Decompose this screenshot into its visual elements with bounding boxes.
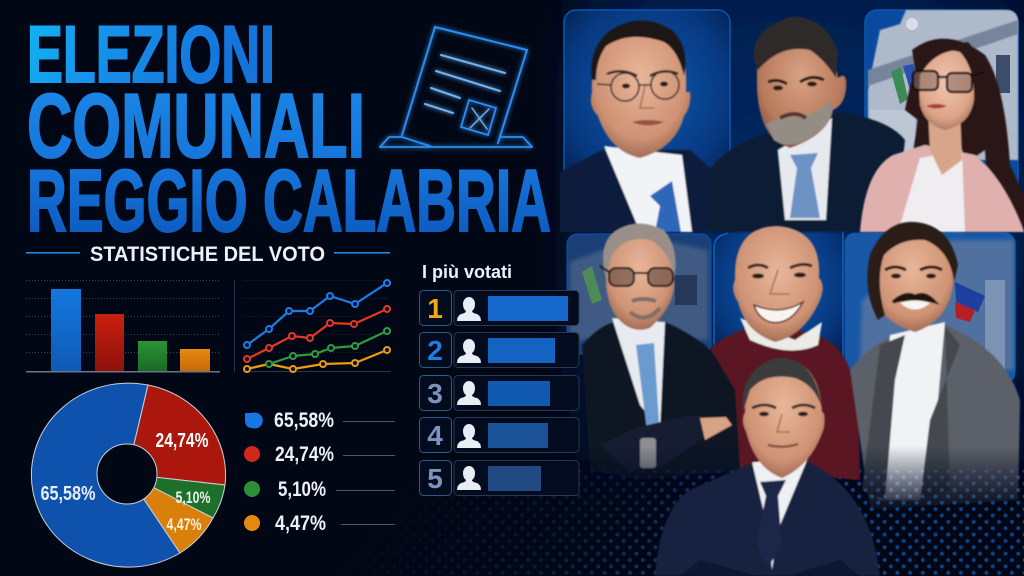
- legend row 24,74%: 24,74%: [275, 443, 334, 466]
- subtitle: statistiche del voto: STATISTICHE DEL VOTO: [90, 243, 325, 266]
- slice: red 24,74%: [127, 385, 226, 485]
- legend row 4,47%: 4,47%: [275, 512, 326, 535]
- legend: [244, 409, 395, 535]
- rank 5: 5: [427, 463, 443, 494]
- donut labels: 4,47%: [166, 515, 202, 534]
- rank 1: 1: [427, 293, 443, 324]
- rank 2: [420, 332, 579, 368]
- line chart: [234, 280, 391, 372]
- slice: blue 65,58%: [31, 383, 180, 567]
- rank 3: [420, 376, 579, 410]
- rank 2: 2: [427, 335, 443, 366]
- photo: bald smiling man in burgundy sweater, bottom centre: [710, 226, 860, 480]
- title: COMUNALI: [27, 76, 365, 177]
- legend row 4,47%: [244, 512, 395, 535]
- title: ELEZIONI: [27, 10, 275, 100]
- panel: bottom left building: [567, 234, 711, 354]
- donut labels: 24,74%: [156, 430, 209, 452]
- photo panels: backdrops: [564, 10, 1018, 383]
- panel: top right building: [865, 10, 1018, 200]
- photo: man with dark glasses, bottom left: [582, 223, 745, 480]
- panel: bottom right building: [845, 233, 1015, 383]
- rank 4: [420, 418, 579, 452]
- photo: woman with glasses, top right: [860, 39, 1024, 232]
- legend row 65,58%: 65,58%: [274, 409, 334, 432]
- photo: man with round glasses, top left: [560, 20, 740, 232]
- legend row 65,58%: [245, 409, 395, 432]
- donut labels: [40, 430, 210, 534]
- panel: bottom centre blue: [714, 222, 843, 360]
- photo: man with grey beard, top centre: [707, 17, 905, 232]
- photo: man with moustache in grey jacket, bottom right: [850, 222, 1020, 510]
- donut labels: 5,10%: [176, 488, 210, 507]
- photo: man in navy suit, bottom front centre: [655, 358, 880, 576]
- ranking list: [420, 290, 579, 496]
- legend row 5,10%: 5,10%: [278, 478, 326, 501]
- title: REGGIO CALABRIA: [27, 151, 551, 250]
- rank 3: 3: [427, 378, 443, 409]
- rank 4: 4: [427, 420, 443, 451]
- legend row 24,74%: [244, 443, 395, 466]
- dotted halftone floor pattern: [300, 470, 1024, 576]
- donut chart: [31, 383, 226, 567]
- donut labels: 65,58%: [40, 483, 96, 505]
- ranking heading: I più votati: [422, 262, 512, 282]
- bar chart: [26, 280, 220, 372]
- rank 5: [420, 460, 579, 496]
- rank 1: [420, 290, 579, 326]
- donut hole: [97, 444, 157, 504]
- slice: orange 4,47%: [127, 474, 213, 553]
- slice: green 5,10%: [127, 474, 225, 518]
- legend row 5,10%: [244, 478, 395, 501]
- title: [27, 10, 551, 250]
- panel: top left blue: [564, 10, 730, 190]
- icon: ballot paper in box: [380, 27, 532, 147]
